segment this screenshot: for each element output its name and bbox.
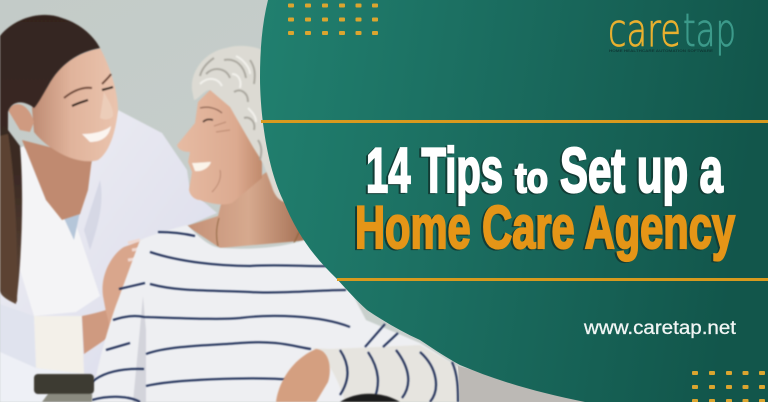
elderly woman face	[177, 88, 262, 204]
photo: caregiver and elderly woman	[0, 15, 590, 402]
title line 1: 14 Tips	[366, 136, 503, 206]
caregiver hand and forearm	[82, 240, 148, 354]
bottom gold rule	[337, 278, 768, 281]
website url: www.caretap.net	[583, 318, 737, 339]
elderly woman neck and chest	[187, 170, 310, 248]
top gold rule	[261, 120, 768, 123]
sweater stripes	[92, 232, 458, 402]
bottom dot grid	[692, 371, 765, 402]
logo: caretap: tap	[683, 4, 736, 57]
title line 1	[366, 136, 724, 206]
wheelchair	[34, 374, 400, 402]
caregiver white uniform	[0, 110, 217, 402]
green curved panel	[260, 0, 768, 402]
caregiver neck and face	[8, 48, 118, 220]
top dot grid	[288, 4, 378, 35]
logo: caretap: care	[608, 4, 681, 57]
title line 1: to	[515, 154, 548, 201]
elderly woman white hair	[192, 46, 284, 202]
striped sweater	[91, 225, 460, 402]
lower wall	[458, 366, 590, 402]
caregiver hair	[0, 15, 100, 304]
logo: caretap: HOME HEALTHCARE AUTOMATION SOFTWARE	[609, 48, 713, 53]
elderly woman hand	[276, 349, 330, 402]
